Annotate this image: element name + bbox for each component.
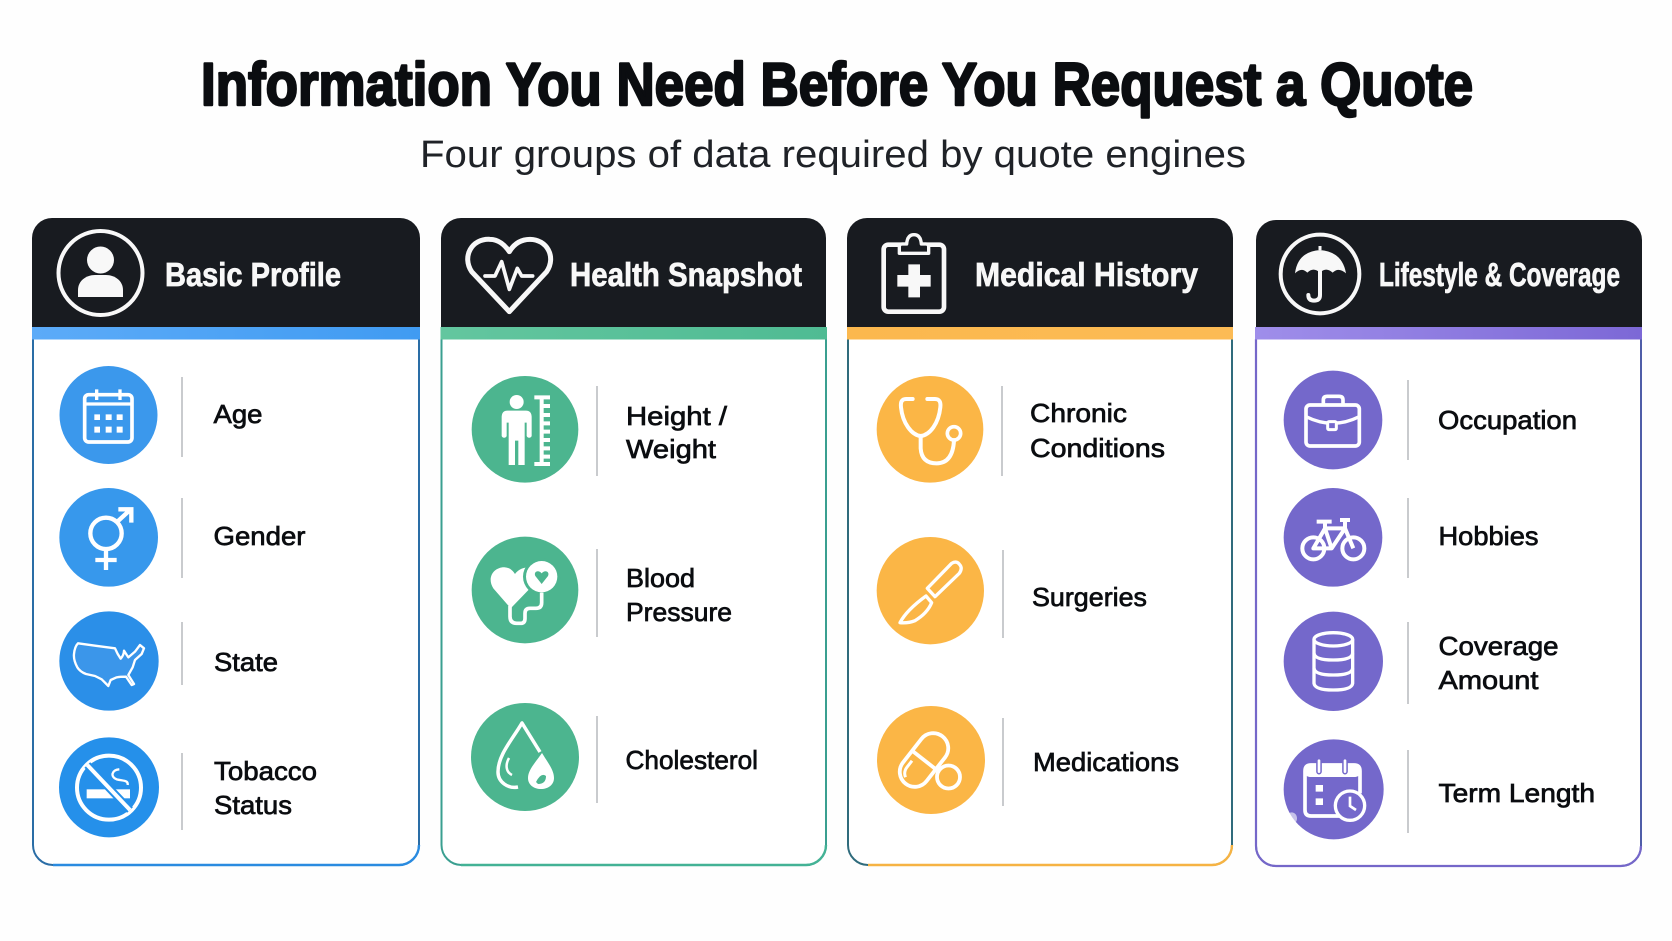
icon: clipboard (884, 235, 944, 312)
item: surgeries (877, 537, 1147, 644)
icon: calendar with clock (1284, 739, 1384, 839)
item: blood pressure (472, 537, 732, 643)
subtitle: Four groups of data required by quote engines (420, 134, 1246, 176)
panel: health snapshot (440, 218, 827, 865)
label: height weight: Weight (626, 434, 717, 464)
item: tobacco status (59, 737, 317, 837)
label: height weight: Height / (626, 401, 728, 431)
icon: pills (877, 706, 985, 814)
header: basic profile (32, 218, 420, 340)
header: medical history (847, 218, 1233, 340)
label: tobacco status: Tobacco (214, 756, 317, 786)
item: medications (877, 706, 1179, 814)
label: term length: Term Length (1438, 778, 1595, 808)
icon: briefcase (1284, 371, 1382, 469)
item: state (59, 611, 278, 711)
icon: bicycle (1284, 488, 1382, 587)
heading: basic profile: Basic Profile (165, 256, 341, 293)
item: height weight (472, 376, 728, 483)
panel: lifestyle and coverage (1255, 220, 1642, 866)
label: coverage amount: Amount (1438, 665, 1539, 695)
item: cholesterol (471, 703, 758, 811)
label: state: State (214, 647, 278, 677)
header: health snapshot (440, 218, 827, 340)
icon: no smoking (59, 737, 159, 837)
label: chronic conditions: Conditions (1030, 433, 1165, 463)
icon: stethoscope (877, 376, 983, 483)
label: occupation: Occupation (1438, 405, 1577, 435)
icon: heart with pulse (468, 239, 551, 312)
label: blood pressure: Pressure (626, 597, 732, 627)
label: gender: Gender (214, 521, 306, 551)
label: age: Age (214, 399, 262, 429)
icon: scalpel (877, 537, 984, 644)
panel: medical history (847, 218, 1233, 865)
label: coverage amount: Coverage (1438, 631, 1558, 661)
heading: medical history: Medical History (975, 256, 1199, 293)
panel: basic profile (32, 218, 420, 865)
item: coverage amount (1284, 612, 1558, 711)
item: term length (1284, 739, 1595, 839)
item: gender (59, 488, 306, 587)
icon: umbrella (1281, 235, 1359, 313)
label: chronic conditions: Chronic (1030, 398, 1127, 428)
label: cholesterol: Cholesterol (626, 745, 758, 775)
item: age (59, 366, 262, 464)
heading: health snapshot: Health Snapshot (570, 256, 802, 293)
icon: heart and gauge (472, 537, 578, 643)
label: tobacco status: Status (214, 790, 292, 820)
label: medications: Medications (1033, 747, 1179, 777)
icon: person (58, 231, 142, 315)
icon: gender symbols (59, 488, 158, 587)
icon: calendar (59, 366, 157, 464)
label: blood pressure: Blood (626, 563, 695, 593)
icon: person and ruler (472, 376, 578, 483)
label: hobbies: Hobbies (1438, 521, 1538, 551)
item: occupation (1284, 371, 1577, 469)
icon: drops (471, 703, 579, 811)
icon: us map (59, 611, 159, 711)
item: hobbies (1284, 488, 1538, 587)
label: surgeries: Surgeries (1032, 582, 1147, 612)
icon: database stack (1284, 612, 1383, 711)
item: chronic conditions (877, 376, 1165, 483)
title: Information You Need Before You Request a Quote (201, 51, 1473, 118)
header: lifestyle and coverage (1255, 220, 1642, 340)
